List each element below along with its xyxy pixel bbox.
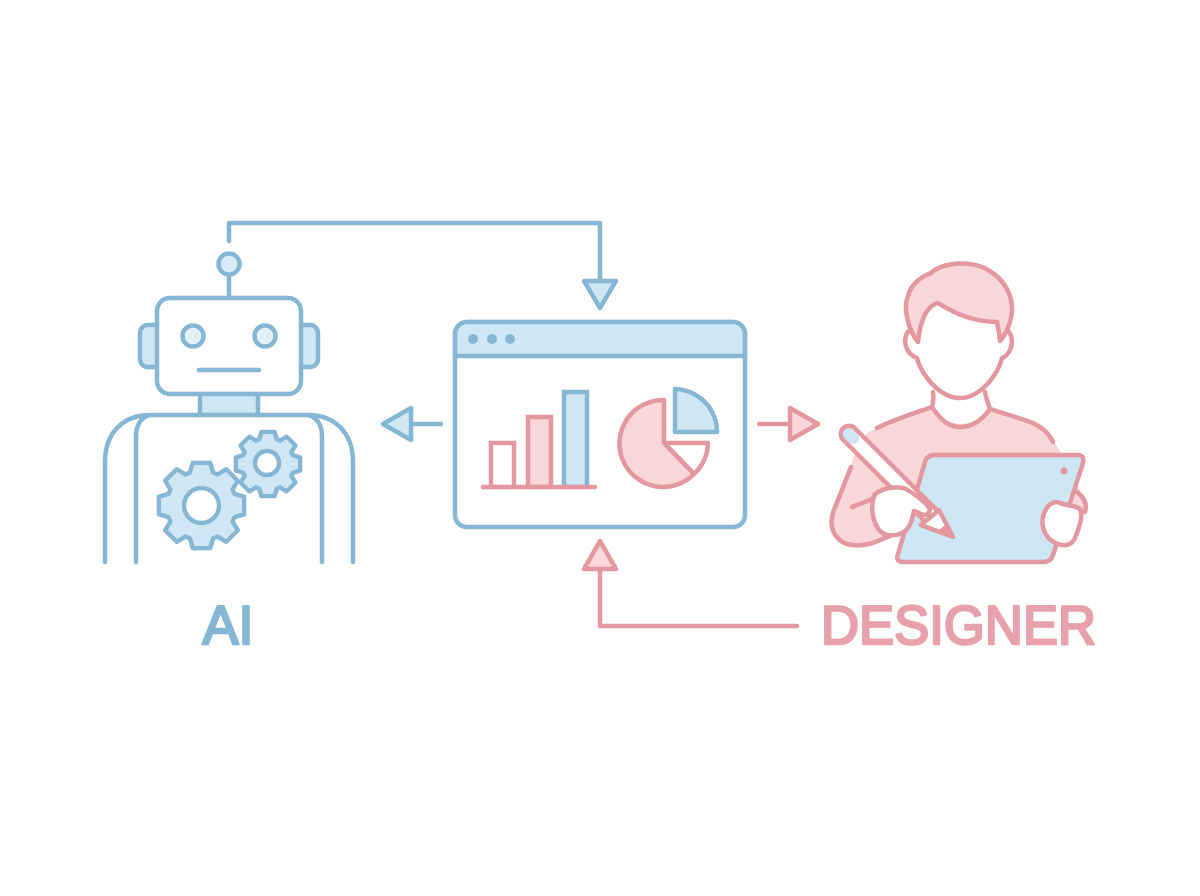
designer tablet	[897, 455, 1083, 562]
designer pencil	[849, 434, 953, 537]
icon: small gear	[236, 432, 300, 496]
bar chart	[483, 392, 595, 487]
robot ears	[140, 325, 318, 367]
icon: large gear	[159, 463, 244, 548]
arrow: dashboard to designer	[759, 408, 818, 440]
designer holding hand	[1042, 502, 1081, 545]
robot head	[157, 298, 301, 394]
designer neck and collar	[932, 392, 990, 427]
designer shoulders and arm	[832, 407, 1086, 545]
window frame	[455, 322, 745, 527]
arrow: AI to dashboard	[229, 223, 616, 308]
arrow: designer to dashboard	[584, 541, 797, 626]
label: AI: AI	[202, 594, 254, 656]
pie chart	[619, 389, 717, 487]
robot antenna	[218, 254, 240, 298]
label: DESIGNER: DESIGNER	[821, 594, 1096, 656]
icon: AI robot	[105, 254, 353, 562]
robot neck	[200, 394, 258, 415]
icon: designer figure	[832, 264, 1086, 562]
arrow: dashboard to AI	[383, 408, 441, 440]
robot body	[105, 415, 353, 562]
window title bar	[455, 322, 745, 356]
designer drawing hand	[872, 487, 930, 535]
designer head and hair	[905, 264, 1012, 398]
designer shirt	[832, 407, 1086, 545]
panel: dashboard window	[455, 322, 745, 527]
